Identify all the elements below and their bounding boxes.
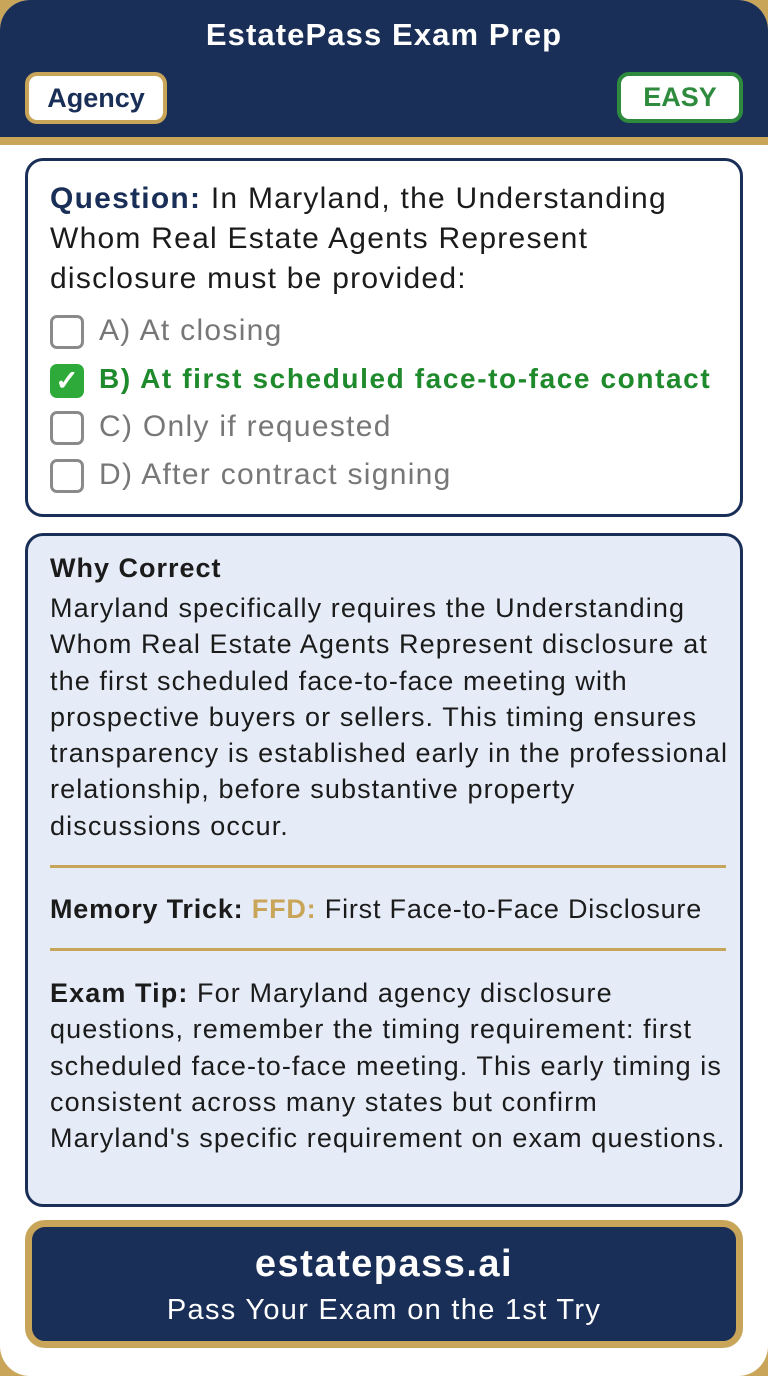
text: explanation: discussions occur. — [50, 811, 289, 841]
icon: check — [50, 364, 84, 398]
text: explanation: Whom Real Estate Agents Represent disclosure at — [50, 629, 708, 659]
exam tip: consistent across many states but confirm — [50, 1087, 598, 1117]
exam tip: Exam Tip: For Maryland agency disclosure — [50, 978, 613, 1008]
title: EstatePass Exam Prep — [206, 17, 562, 52]
option A: A) At closing — [99, 314, 283, 347]
exam tip: scheduled face-to-face meeting. This early timing is — [50, 1051, 722, 1081]
icon: check: ✓ — [55, 365, 79, 396]
badge: difficulty — [617, 72, 743, 123]
option D: D) After contract signing — [99, 458, 452, 491]
panel: explanation — [25, 533, 743, 1207]
heading: why correct: Why Correct — [50, 553, 222, 583]
badge: category — [25, 72, 167, 124]
badge: difficulty: EASY — [643, 82, 717, 112]
question text: disclosure must be provided: — [50, 262, 467, 295]
text: explanation: prospective buyers or sellers. This timing ensures — [50, 702, 697, 732]
footer tagline: Pass Your Exam on the 1st Try — [167, 1294, 601, 1326]
panel: question — [25, 158, 743, 517]
option C: C) Only if requested — [99, 410, 392, 443]
text: explanation — [50, 593, 728, 841]
badge: category: Agency — [47, 82, 145, 112]
option B correct: B) At first scheduled face-to-face contact — [99, 363, 711, 394]
exam tip — [50, 978, 725, 1153]
text: explanation: the first scheduled face-to-face meeting with — [50, 666, 628, 696]
footer banner — [25, 1220, 743, 1348]
header — [0, 0, 768, 137]
text: explanation: relationship, before substantive property — [50, 774, 575, 804]
text: explanation: Maryland specifically requires the Understanding — [50, 593, 685, 623]
exam tip: Maryland's specific requirement on exam questions. — [50, 1123, 725, 1153]
footer url: estatepass.ai — [255, 1243, 513, 1285]
question text: Whom Real Estate Agents Represent — [50, 222, 588, 255]
question text — [50, 182, 667, 295]
text: explanation: transparency is established early in the professional — [50, 738, 728, 768]
memory trick: Memory Trick: FFD: First Face-to-Face Disclosure — [50, 894, 702, 924]
question text: Question: In Maryland, the Understanding — [50, 182, 667, 215]
exam tip: questions, remember the timing requirement: first — [50, 1014, 692, 1044]
